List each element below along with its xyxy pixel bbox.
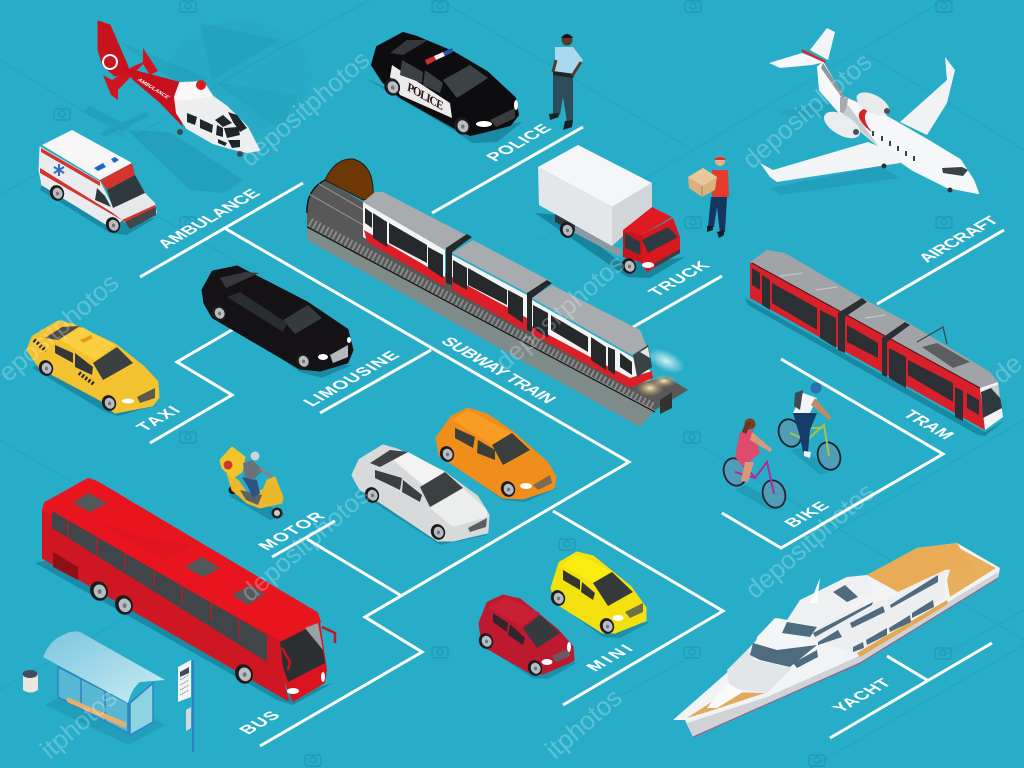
connector lines: [140, 127, 1004, 746]
watermarks: depositphotos: [489, 248, 630, 377]
white car: [353, 446, 488, 545]
red mini car: [476, 596, 578, 679]
label: limousine: LIMOUSINE: [299, 348, 404, 409]
scooter with rider: [220, 447, 285, 520]
ambulance: [39, 130, 157, 235]
taxi: [28, 322, 158, 416]
label: bike: BIKE: [780, 499, 834, 530]
truck: [535, 145, 685, 278]
aircraft: [760, 28, 978, 195]
helicopter tail: [98, 21, 130, 76]
red stripes: [364, 230, 445, 287]
helicopter: [84, 21, 312, 193]
label: police: POLICE: [482, 121, 556, 164]
police door text: POLICE: [407, 79, 444, 113]
watermarks: depositphotos: [739, 476, 880, 605]
helicopter: AMBULANCE: [135, 78, 171, 100]
tram: [745, 250, 1005, 436]
label: truck: TRUCK: [644, 258, 715, 299]
bus stop sign: [178, 660, 193, 752]
windows and doors: [365, 208, 632, 375]
delivery man with parcel: [688, 156, 729, 238]
police officer: [549, 34, 583, 130]
label: mini: MINI: [582, 642, 637, 674]
trash bin: [22, 670, 38, 692]
helicopter body: [175, 82, 259, 152]
watermarks: itphotos: [34, 682, 123, 765]
label: bus: BUS: [235, 708, 284, 737]
bus shelter: [43, 631, 165, 745]
label: tram: TRAM: [899, 407, 958, 442]
watermarks: depositphotos: [736, 46, 877, 175]
orange car: [437, 409, 558, 502]
subway train: [363, 192, 653, 388]
male cyclist: [775, 382, 844, 475]
watermarks: depositphotos: [234, 479, 375, 608]
subway tunnel and track: [307, 159, 688, 427]
car sides: [363, 202, 445, 285]
watermarks: depositphotos: [234, 44, 375, 173]
helicopter shadow: [84, 21, 312, 193]
label: ambulance: AMBULANCE: [153, 186, 265, 251]
female cyclist: [720, 418, 789, 511]
watermarks: itphotos: [539, 682, 628, 765]
bus: [35, 479, 335, 705]
yellow mini car: [548, 553, 650, 638]
label: aircraft: AIRCRAFT: [914, 213, 1004, 265]
label: yacht: YACHT: [828, 676, 896, 715]
label: taxi: TAXI: [132, 403, 185, 434]
cyclists: [720, 382, 844, 511]
track lamp glow: [637, 380, 663, 396]
roofs: [363, 192, 470, 250]
limousine: [198, 267, 352, 378]
label: subway train: SUBWAY TRAIN: [437, 334, 560, 406]
label: motor: MOTOR: [254, 509, 329, 553]
yacht: [673, 543, 1000, 737]
police car: [365, 33, 522, 143]
